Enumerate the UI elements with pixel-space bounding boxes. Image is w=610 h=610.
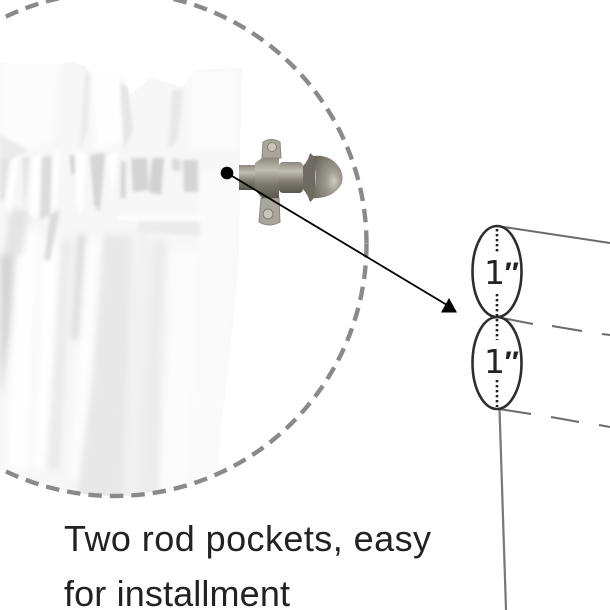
top pocket oval (472, 226, 522, 317)
arrow: from rod to pocket diagram (221, 167, 457, 312)
dashed circle outline (0, 0, 366, 496)
label: bottom 1 inch: 1 (484, 342, 505, 381)
caption text: Two rod pockets, easy (64, 518, 431, 559)
bottom pocket oval (472, 317, 522, 409)
panel: curtain close-up (0, 68, 202, 496)
diagram: rod pocket dimensions (472, 226, 610, 610)
label: bottom 1 inch: ″ (503, 346, 519, 379)
icon: curtain rod finial (239, 140, 343, 225)
curtain outlines (497, 226, 610, 610)
label: top 1 inch: 1 (484, 253, 505, 292)
caption text (64, 518, 431, 610)
label: top 1 inch: ″ (503, 257, 519, 290)
gathered rod pocket (0, 70, 205, 260)
dotted centre lines (496, 229, 498, 407)
